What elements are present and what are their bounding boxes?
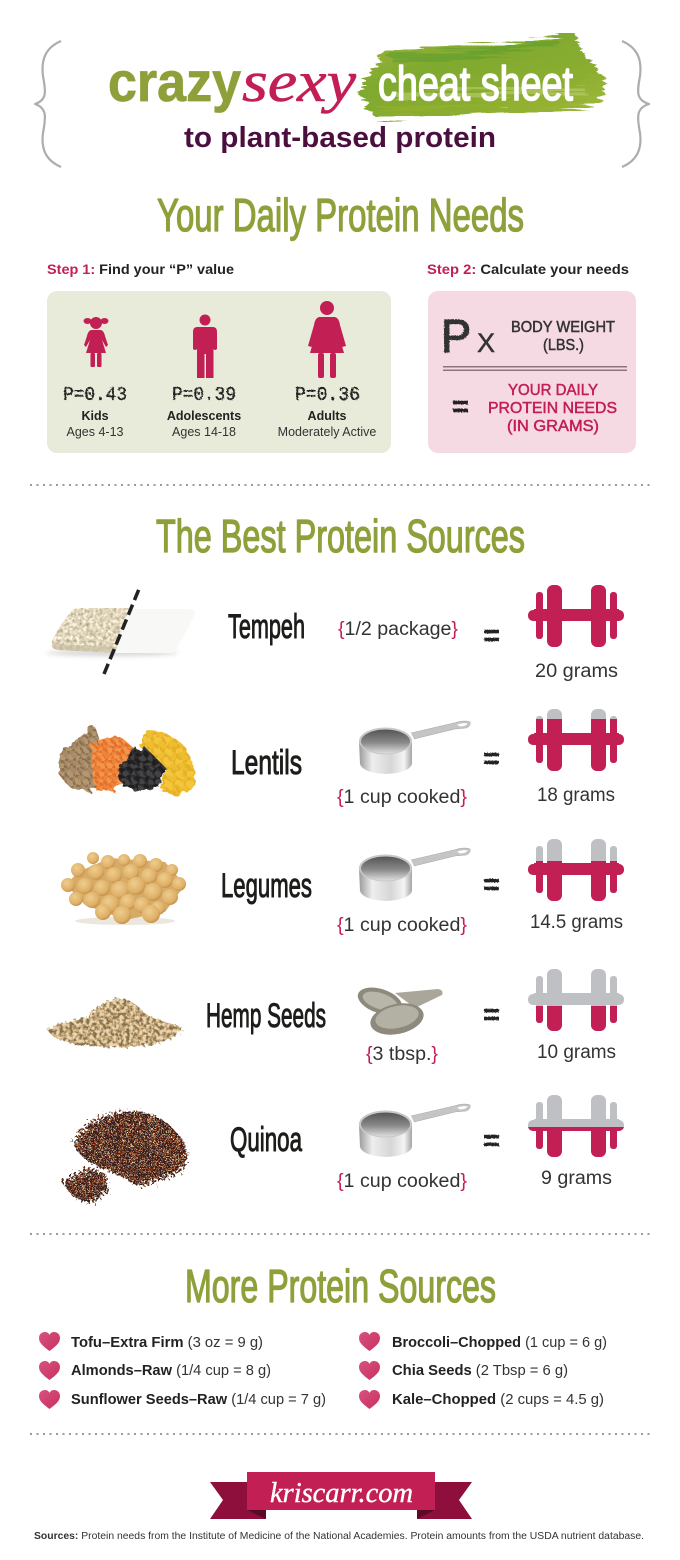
formula: p times body weight: X: [477, 328, 495, 358]
item: kale: Kale–Chopped (2 cups = 4.5 g): [392, 1392, 604, 1408]
formula: equals your daily protein needs: (IN GRAMS): [507, 418, 599, 435]
measuring cup: [359, 721, 470, 774]
measuring cup: [359, 1104, 470, 1157]
amount: {1 cup cooked}: [337, 787, 467, 808]
image: chickpeas: [61, 852, 186, 925]
grams: 10 grams: [537, 1042, 616, 1063]
equals sign: =: [483, 869, 500, 901]
kids p value: Ages 4-13: [67, 425, 124, 439]
equals sign: =: [483, 743, 500, 775]
item: broccoli: Broccoli–Chopped (1 cup = 6 g): [392, 1335, 607, 1351]
name: Quinoa: [230, 1121, 302, 1159]
name: Tempeh: [228, 608, 305, 646]
title words: cheat sheet: cheat sheet: [378, 58, 573, 111]
item: sunflower seeds: Sunflower Seeds–Raw (1/4 cup = 7 g): [71, 1392, 326, 1408]
right curly bracket: [622, 41, 649, 167]
formula: equals your daily protein needs: PROTEIN NEEDS: [488, 400, 617, 417]
icon: adult: [308, 301, 346, 378]
grams: 18 grams: [537, 785, 615, 806]
adults p value: [278, 384, 376, 439]
grams: 20 grams: [535, 661, 618, 682]
barbell: 18 grams: [528, 709, 624, 771]
equals sign: =: [483, 620, 500, 652]
title block: [35, 33, 649, 167]
subtitle: to plant-based protein: [184, 122, 496, 154]
heading: more protein sources: More Protein Sources: [185, 1260, 496, 1312]
row: legumes: [61, 839, 624, 936]
green paint brush stroke: [359, 33, 606, 118]
kids p value: P=0.43: [63, 384, 127, 406]
item: almonds: Almonds–Raw (1/4 cup = 8 g): [71, 1363, 271, 1379]
kids p value: [63, 384, 127, 439]
image: quinoa pile: [62, 1111, 187, 1203]
step 2 label: Step 2: Calculate your needs: [427, 262, 629, 277]
icon: adolescent: [193, 314, 217, 378]
adolescents p value: Ages 14-18: [172, 425, 236, 439]
image: lentil piles: [58, 726, 196, 796]
name: Legumes: [221, 867, 312, 905]
barbell: full: [528, 585, 624, 647]
adolescents p value: P=0.39: [172, 384, 236, 406]
row: tempeh: [46, 585, 624, 682]
image: hemp seed pile: [47, 998, 183, 1047]
banner: kriscarr.com: [210, 1472, 472, 1519]
panel: p value: [47, 291, 391, 453]
formula: equals your daily protein needs: YOUR DAILY: [508, 382, 598, 399]
icon: kid: [84, 317, 108, 367]
formula: equals your daily protein needs: [452, 382, 617, 435]
image: tempeh block: [46, 589, 195, 674]
name: Lentils: [231, 744, 302, 782]
adolescents p value: Adolescents: [167, 409, 241, 423]
measuring cup: [359, 848, 470, 901]
heading: your daily protein needs: Your Daily Protein Needs: [157, 189, 524, 241]
left curly bracket: [35, 41, 61, 167]
measuring spoons: [354, 982, 442, 1039]
formula: equals your daily protein needs: =: [452, 391, 469, 423]
item: chia seeds: Chia Seeds (2 Tbsp = 6 g): [392, 1363, 568, 1379]
panel: calculation: [428, 291, 636, 453]
row: quinoa: [62, 1095, 624, 1203]
adults p value: P=0.36: [295, 384, 360, 406]
adults p value: Adults: [308, 409, 346, 423]
barbell: 14.5 grams: [528, 839, 624, 901]
step 1 label: Step 1: Find your “P” value: [47, 262, 235, 277]
row: hemp seeds: [47, 969, 624, 1065]
row: lentils: [58, 709, 624, 808]
amount: {1 cup cooked}: [337, 1171, 467, 1192]
sources note: Sources: Protein needs from the Institute of Medicine of the National Academies. Protein amounts from the USDA nutrient database.: [34, 1531, 644, 1542]
heading: the best protein sources: The Best Protein Sources: [156, 510, 525, 562]
title word: sexy: sexy: [242, 49, 356, 114]
amount: {1/2 package}: [338, 619, 458, 640]
formula: p times body weight: P: [441, 310, 471, 362]
equals sign: =: [483, 1125, 500, 1157]
banner: kriscarr.com: kriscarr.com: [270, 1478, 413, 1509]
list: more protein sources: [39, 1332, 607, 1409]
barbell: 10 grams: [528, 969, 624, 1031]
grams: 14.5 grams: [530, 912, 623, 933]
adolescents p value: [167, 384, 241, 439]
kids p value: Kids: [81, 409, 109, 423]
amount: {3 tbsp.}: [366, 1044, 438, 1065]
adults p value: Moderately Active: [278, 425, 376, 439]
title word: crazy: crazy: [108, 50, 241, 113]
name: Hemp Seeds: [206, 997, 326, 1035]
equals sign: =: [483, 999, 500, 1031]
formula: p times body weight: [441, 310, 615, 362]
amount: {1 cup cooked}: [337, 915, 467, 936]
formula: p times body weight: BODY WEIGHT: [511, 319, 615, 336]
item: tofu: Tofu–Extra Firm (3 oz = 9 g): [71, 1335, 263, 1351]
barbell: 9 grams: [528, 1095, 624, 1157]
grams: 9 grams: [541, 1168, 612, 1189]
formula: p times body weight: (LBS.): [543, 337, 584, 354]
